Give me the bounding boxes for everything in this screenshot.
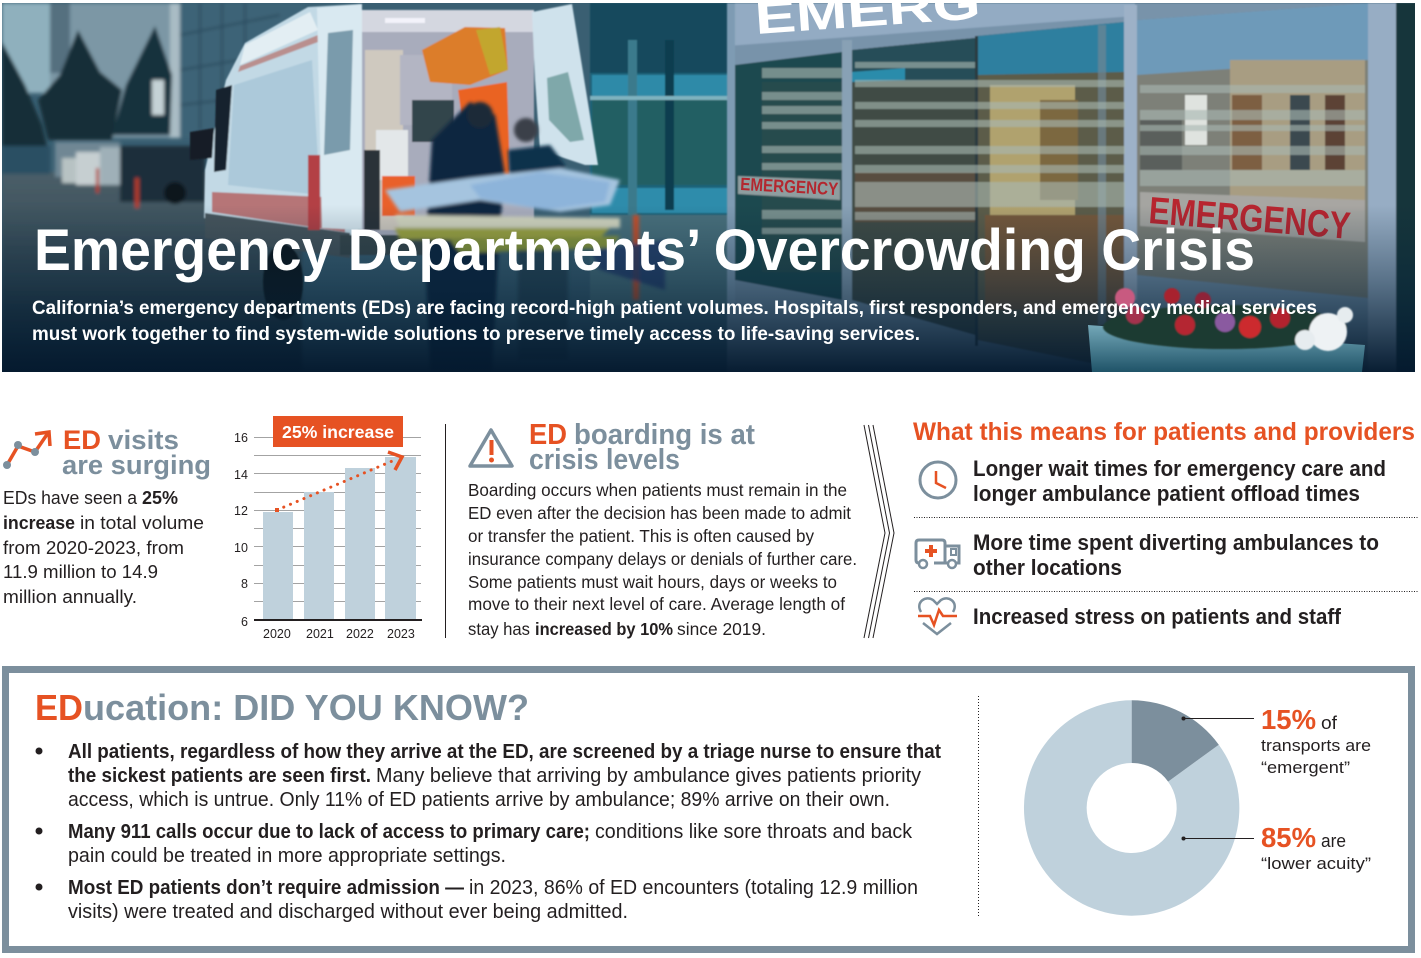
- heading: ED boarding is at crisis levels: boarding is at: [574, 419, 755, 451]
- text: boarding description: stay has: [468, 619, 530, 639]
- text: diverting: other locations: [973, 555, 1122, 580]
- text: boarding description: ED even after the decision has been made to admit: [468, 503, 851, 523]
- bar chart: ED visits 2020-2023: [234, 416, 422, 641]
- text: boarding description: or transfer the patient. This is often caused by: [468, 526, 814, 546]
- icon: heart with pulse: [918, 598, 957, 634]
- callout: 85% lower acuity: [1261, 822, 1371, 873]
- photo: parking lot and building background: [2, 3, 305, 372]
- text: diverting: [973, 530, 1379, 580]
- title: Emergency Departments’ Overcrowding Crisis: [34, 218, 1255, 283]
- photo: flower planter: [1088, 288, 1365, 372]
- hero dark gradient overlay: [2, 205, 1415, 372]
- heading: EDucation DID YOU KNOW: ED: [35, 687, 83, 728]
- bullet: 911 calls: [36, 821, 913, 867]
- bullet: triage: [36, 741, 941, 811]
- callout: 15% emergent: [1261, 704, 1371, 777]
- x axis labels: [263, 627, 415, 641]
- bullet: admission: Most ED patients don’t require admission —: [68, 877, 464, 899]
- text: boarding description: Some patients must wait hours, days or weeks to: [468, 572, 837, 592]
- heading: what this means for patients and providers: What this means for patients and providers: [913, 418, 1415, 446]
- text: boarding description: increased by 10%: [535, 619, 673, 639]
- y axis labels: [234, 431, 248, 629]
- text: ED visits description: 25%: [142, 488, 178, 508]
- y axis labels: 16: [234, 431, 248, 445]
- heading: ED boarding is at crisis levels: crisis levels: [529, 444, 680, 476]
- callout: 15% emergent: 15%: [1261, 704, 1316, 735]
- donut chart: transports acuity: [1024, 700, 1254, 916]
- callout: 85% lower acuity: 85%: [1261, 822, 1316, 853]
- y axis labels: 14: [234, 468, 248, 482]
- text: diverting: More time spent diverting ambulances to: [973, 530, 1379, 555]
- arrow: triple-line chevron: [864, 425, 894, 638]
- x axis labels: 2021: [306, 627, 334, 641]
- photo: small red door sign: EMERGENCY: [740, 174, 839, 199]
- bullet: triage: All patients, regardless of how they arrive at the ED, are screened by a triage nurse to ensure that: [68, 741, 941, 763]
- icon: rising trend arrow: [3, 432, 50, 469]
- text: ED visits description: EDs have seen a: [3, 488, 138, 508]
- y axis labels: 6: [241, 615, 248, 629]
- callout: 15% emergent: “emergent”: [1261, 758, 1350, 777]
- icon: ambulance: [916, 540, 959, 568]
- photo: ambulance body: [190, 4, 598, 320]
- text: ED visits description: from 2020-2023, from: [3, 538, 184, 558]
- y axis labels: 10: [234, 541, 248, 555]
- text: ED visits description: million annually.: [3, 587, 137, 607]
- heading: ED visits are surging: visits: [108, 425, 179, 455]
- callout: 25% increase: 25% increase: [282, 422, 394, 442]
- heading: ED visits are surging: are surging: [62, 450, 211, 480]
- x axis labels: 2023: [387, 627, 415, 641]
- item: diverting ambulances: [916, 530, 1379, 580]
- heading: ED boarding is at crisis levels: ED: [529, 419, 567, 451]
- panel: ED boarding: [468, 419, 857, 639]
- bullet: triage: access, which is untrue. Only 11% of ED patients arrive by ambulance; 89% arrive on their own.: [68, 789, 890, 811]
- x axis labels: 2020: [263, 627, 291, 641]
- text: boarding description: insurance company delays or denials of further care.: [468, 549, 857, 569]
- heading: ED visits are surging: [62, 425, 211, 480]
- item: longer wait times: [920, 456, 1386, 506]
- icon: clock: [920, 462, 956, 498]
- text: ED visits description: in total volume: [80, 513, 204, 533]
- y axis labels: 8: [241, 577, 248, 591]
- bars: [263, 457, 416, 620]
- panel: ED visits are surging: [3, 425, 211, 607]
- callout: 25% increase: [273, 416, 403, 447]
- text: boarding description: Boarding occurs when patients must remain in the: [468, 480, 847, 500]
- text: ED visits description: 11.9 million to 14.9: [3, 562, 158, 582]
- heading: ED boarding is at crisis levels: [529, 419, 755, 476]
- heading: EDucation DID YOU KNOW: ucation: DID YOU KNOW?: [83, 687, 529, 728]
- bullet: admission: in 2023, 86% of ED encounters (totaling 12.9 million: [469, 877, 918, 899]
- item: increased stress: [918, 598, 1342, 634]
- text: stress: Increased stress on patients and staff: [973, 604, 1342, 629]
- photo: hospital entrance sliding doors: [727, 3, 1417, 372]
- text: boarding description: move to their next level of care. Average length of: [468, 594, 845, 614]
- callout: 15% emergent: of: [1321, 713, 1338, 733]
- bullet: admission: visits) were treated and discharged without ever being admitted.: [68, 901, 628, 923]
- text: boarding description: [468, 480, 857, 639]
- bullet: 911 calls: Many 911 calls occur due to lack of access to primary care;: [68, 821, 590, 843]
- bullet: 911 calls: conditions like sore throats and back: [595, 821, 913, 843]
- callout: 85% lower acuity: are: [1321, 831, 1346, 851]
- x axis labels: 2022: [346, 627, 374, 641]
- hero photo: ambulance at emergency entrance: [2, 0, 1417, 372]
- text: wait times: Longer wait times for emergency care and: [973, 456, 1386, 481]
- panel: what this means: [913, 418, 1419, 634]
- y axis labels: 12: [234, 504, 248, 518]
- icon: warning triangle: [470, 430, 512, 466]
- bullet: admission: [36, 877, 918, 923]
- callout: 15% emergent: transports are: [1261, 736, 1371, 755]
- bullet: triage: Many believe that arriving by ambulance gives patients priority: [376, 765, 921, 787]
- callout: 85% lower acuity: “lower acuity”: [1261, 854, 1371, 873]
- text: boarding description: since 2019.: [677, 619, 766, 639]
- hero subtitle: [32, 298, 1317, 345]
- photo: paramedics and stretcher: [385, 102, 665, 372]
- text: ED visits description: [3, 488, 204, 607]
- text: wait times: [973, 456, 1386, 506]
- bullet: triage: the sickest patients are seen first.: [68, 765, 371, 787]
- text: ED visits description: increase: [3, 513, 75, 533]
- heading: ED visits are surging: ED: [63, 425, 101, 455]
- trend arrow dotted: [275, 452, 402, 512]
- bullet: 911 calls: pain could be treated in more appropriate settings.: [68, 845, 506, 867]
- hero subtitle: California’s emergency departments (EDs) are facing record-high patient volumes. Hospitals, first responders, and emergency medical services: [32, 298, 1317, 319]
- hero subtitle: must work together to find system-wide solutions to preserve timely access to life-saving services.: [32, 324, 920, 345]
- photo: teal building glass: [590, 3, 735, 305]
- panel: EDucation did you know: [6, 670, 1412, 950]
- text: wait times: longer ambulance patient offload times: [973, 481, 1360, 506]
- photo: large red door sign: EMERGENCY: [1147, 190, 1352, 248]
